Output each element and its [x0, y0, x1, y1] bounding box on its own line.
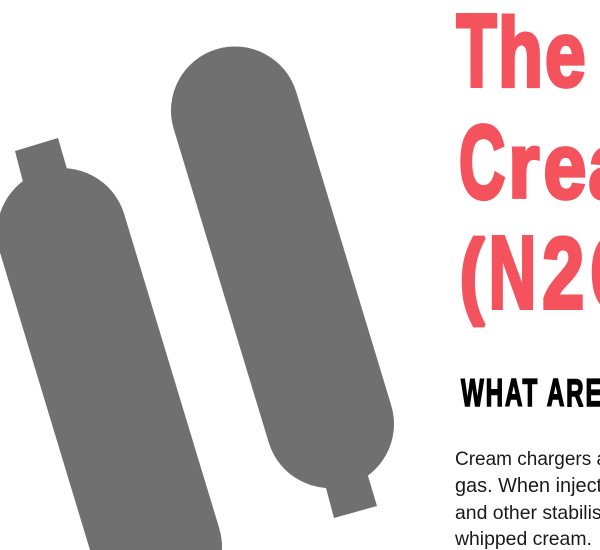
text block: description: [454, 449, 600, 550]
title: [456, 0, 600, 331]
text block: description: whipped cream.: [454, 528, 592, 550]
title: e: [545, 1, 586, 106]
title: (: [460, 222, 485, 327]
title: e: [544, 115, 586, 219]
title: r: [508, 115, 539, 217]
title: N: [489, 216, 536, 331]
title: h: [498, 0, 543, 107]
title: C: [459, 105, 505, 221]
title: 2: [542, 216, 584, 330]
icon: right gas canister: [235, 110, 377, 518]
icon: left gas canister: [15, 138, 157, 547]
